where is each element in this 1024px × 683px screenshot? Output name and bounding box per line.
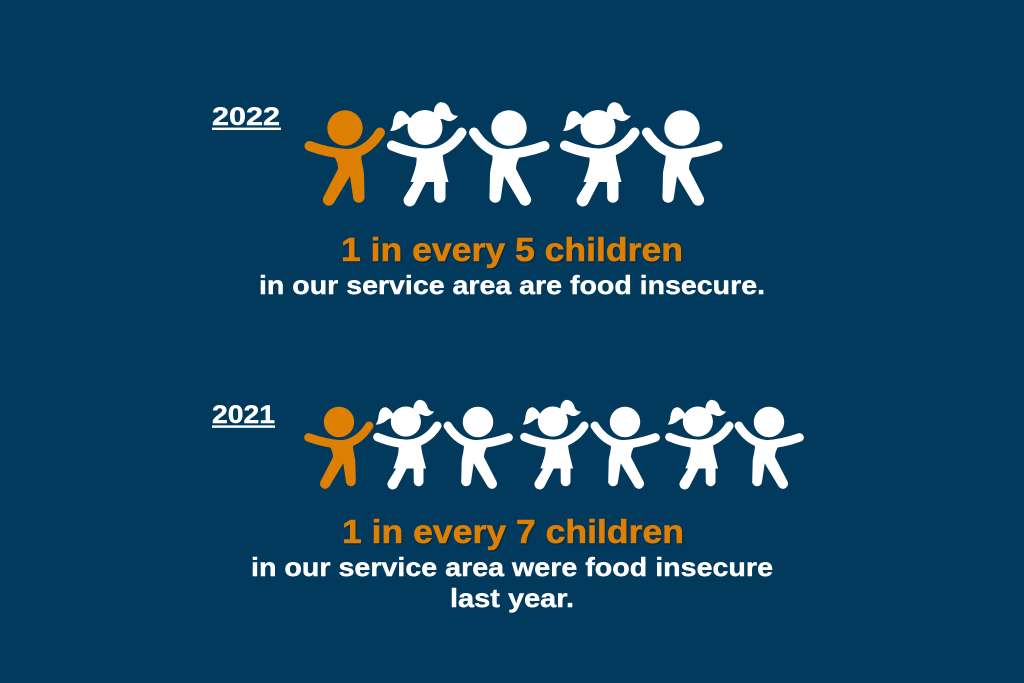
icon: white boy (474, 110, 544, 206)
icon: white girl (563, 102, 634, 206)
icon: white boy (448, 407, 509, 489)
subtext 2021 (251, 552, 773, 613)
subtext 2022: in our service area are food insecure. (259, 270, 765, 300)
icon: white boy (739, 407, 800, 489)
icon: white girl (668, 400, 729, 489)
icon: white girl (390, 102, 462, 206)
icon: white boy (647, 110, 718, 206)
icon: white girl (523, 400, 584, 489)
subtext 2021: last year. (450, 583, 574, 613)
icon: orange child (310, 110, 380, 206)
section: 2022 (212, 102, 765, 300)
icon: white girl (376, 400, 437, 489)
icon: white boy (595, 407, 656, 489)
headline: 1 in every 5 children: 1 in every 5 children (341, 231, 683, 268)
headline: 1 in every 7 children: 1 in every 7 children (342, 513, 684, 550)
icon row: 1 orange child of 7 (308, 400, 800, 489)
icon: orange child (308, 407, 369, 489)
year label 2022: 2022 (212, 103, 280, 131)
year label 2021: 2021 (212, 401, 275, 429)
icon row: 1 orange child of 5 (310, 102, 718, 206)
subtext 2021: in our service area were food insecure (251, 552, 773, 582)
section: 2021 (212, 400, 800, 613)
